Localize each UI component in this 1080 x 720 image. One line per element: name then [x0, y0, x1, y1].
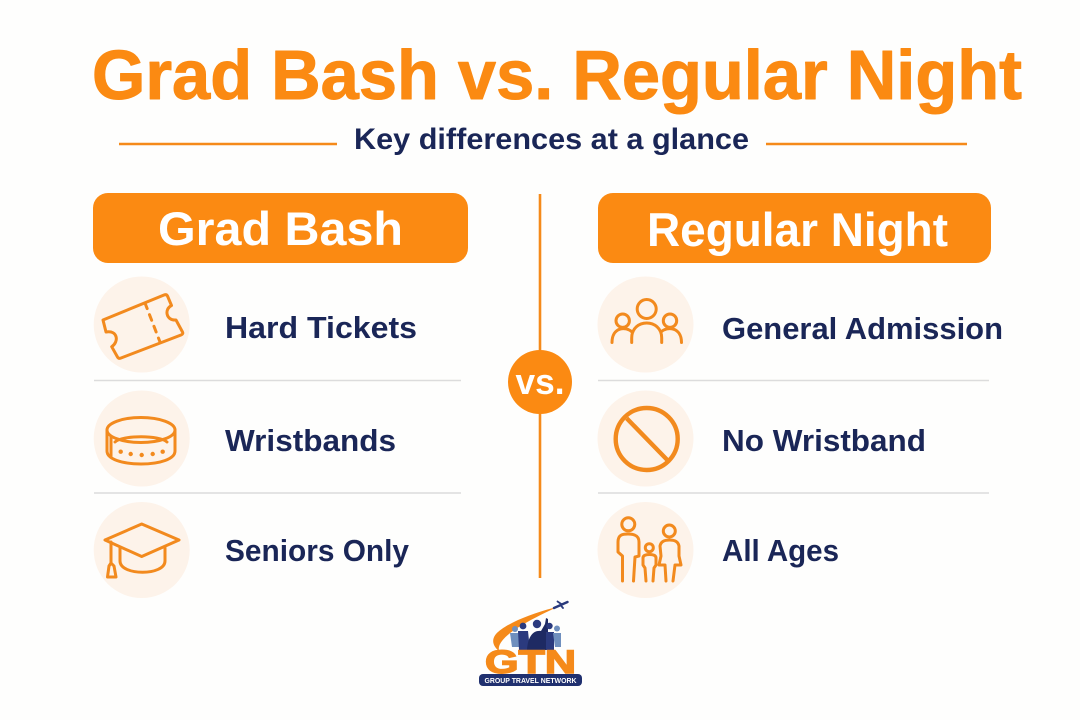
label: hard tickets: Hard Tickets	[225, 310, 417, 345]
icon: wristband	[94, 390, 190, 486]
label: seniors only: Seniors Only	[225, 533, 410, 568]
header: grad bash	[93, 193, 468, 263]
label: wristbands: Wristbands	[225, 423, 396, 458]
logo swoosh	[493, 608, 553, 651]
logo plane	[554, 602, 568, 608]
logo: group travel network	[479, 602, 582, 686]
header: regular night: Regular Night	[647, 203, 948, 256]
logo wordmark: GTN	[485, 644, 576, 680]
icon: group of people	[598, 276, 694, 372]
label: all ages: All Ages	[722, 533, 839, 568]
header: grad bash: Grad Bash	[158, 202, 403, 255]
vs divider line	[539, 194, 541, 578]
logo people	[510, 618, 561, 650]
vs badge: vs.	[516, 361, 564, 402]
icon: no symbol	[598, 390, 694, 486]
header: regular night	[598, 193, 991, 263]
logo banner: GROUP TRAVEL NETWORK	[484, 678, 576, 685]
panel: regular night	[598, 193, 1003, 598]
icon: ticket	[94, 276, 190, 372]
panel: grad bash	[93, 193, 468, 598]
subtitle with rules: Key differences at a glance	[354, 123, 749, 156]
icon: graduation cap	[94, 502, 190, 598]
icon: family	[598, 502, 694, 598]
label: no wristband: No Wristband	[722, 423, 926, 458]
label: general admission: General Admission	[722, 311, 1003, 346]
title: Grad Bash vs. Regular Night	[92, 36, 1022, 114]
vs badge	[508, 350, 572, 414]
